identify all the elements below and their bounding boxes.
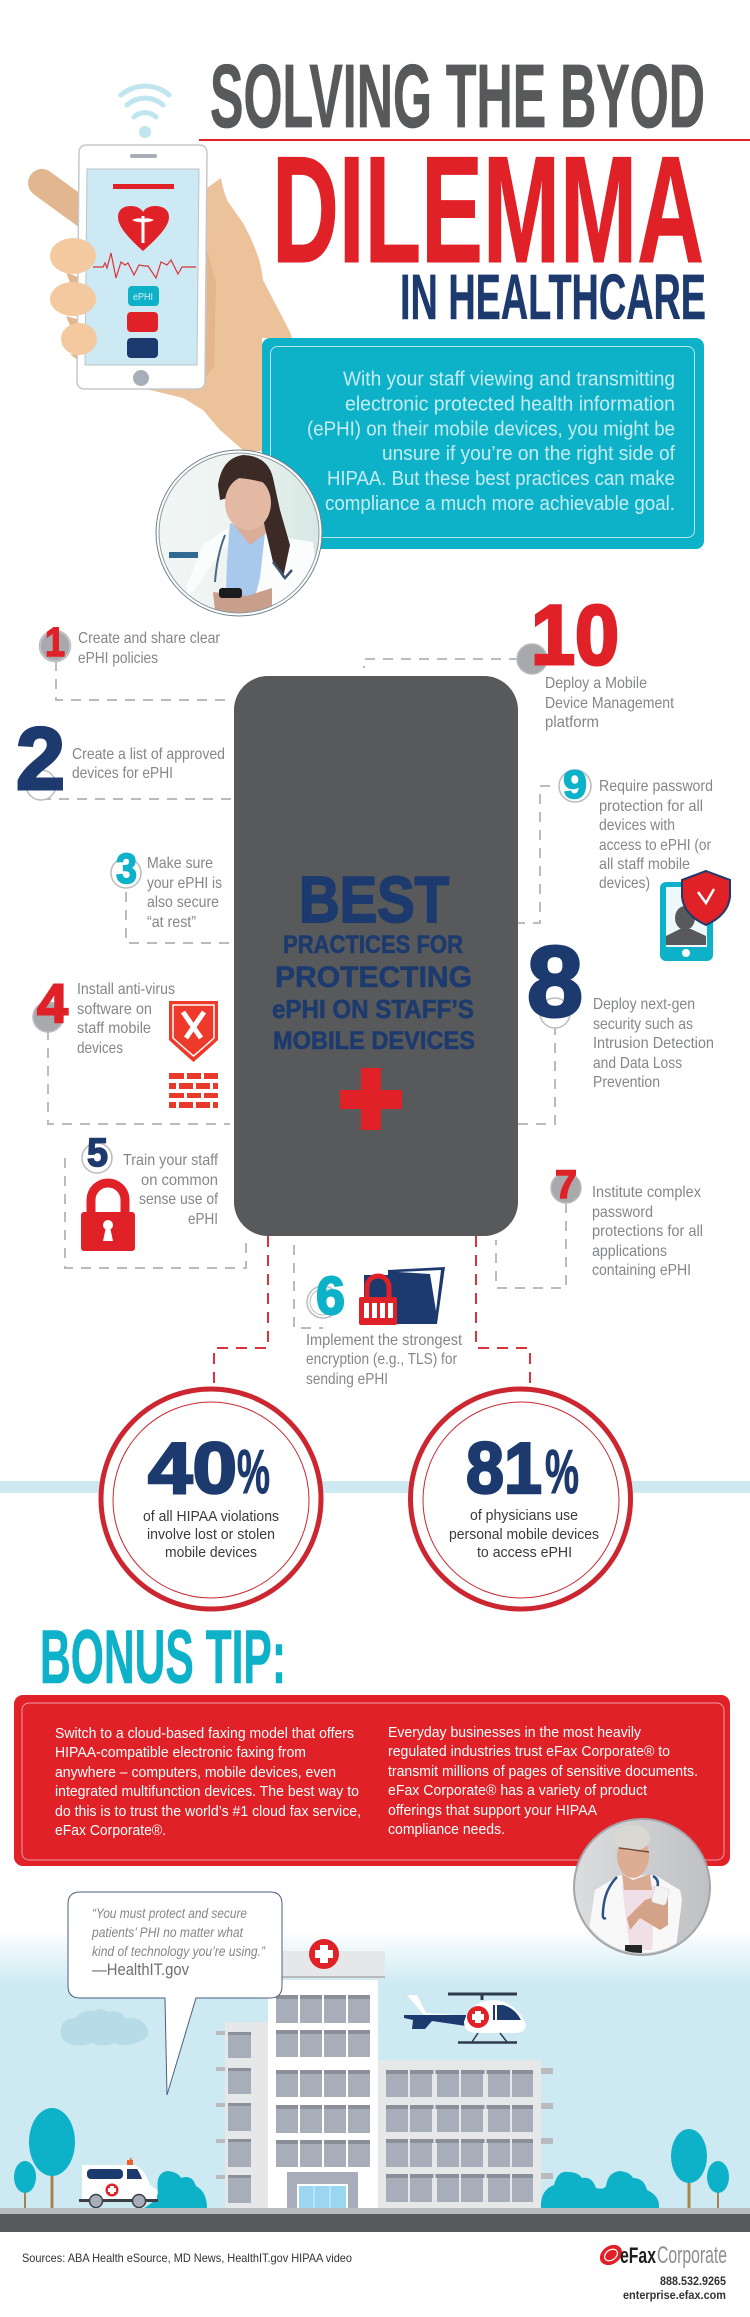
step 5 [81,1131,218,1251]
icon: padlock [81,1183,135,1251]
statistic text [143,1508,279,1561]
hospital scene [0,1939,750,2232]
button: ePHI: ePHI [133,292,153,303]
step 3: 3 [116,845,137,893]
icon: eFax swirl [596,2241,626,2269]
connector lines: red dashes [214,1236,530,1392]
connector lines: grey dashes [41,659,566,1328]
step 10 text: Deploy a Mobile [545,675,647,692]
intro text: With your staff viewing and transmitting [343,368,675,390]
building: left wing [216,2022,268,2208]
fingers [50,238,97,355]
step 8 text: Prevention [593,1074,660,1091]
illustration: hand holding phone [42,86,292,451]
step 5 text: Train your staff [123,1152,218,1169]
hand [42,178,292,451]
bonus tip right column: compliance needs. [388,1821,505,1838]
bonus tip left column: Switch to a cloud-based faxing model that offers [55,1725,354,1742]
callout: HealthIT.gov quote [68,1892,282,2095]
heading: best practices: PRACTICES FOR [283,931,463,959]
statistic text: of all HIPAA violations [143,1508,279,1525]
statistic text: of physicians use [470,1507,578,1524]
statistic text: involve lost or stolen [147,1526,275,1543]
step 2 text: devices for ePHI [72,765,173,782]
statistic text [449,1507,599,1561]
heading: best practices: PROTECTING [275,961,472,994]
step 7 text: password [592,1204,653,1221]
icon: shield with swords [169,1001,218,1062]
quote text: patients’ PHI no matter what [91,1924,244,1940]
helicopter [404,1994,526,2042]
sky background [0,1930,750,2208]
panel: intro [262,338,704,549]
step 7: 7 [555,1163,577,1207]
step 6 text: Implement the strongest [306,1332,463,1349]
step 3 text: your ePHI is [147,875,222,892]
step 3 text: “at rest” [147,914,196,931]
step 8 text: Deploy next-gen [593,996,695,1013]
step 9 text: devices) [599,875,650,892]
logo: eFax Corporate [596,2241,727,2269]
step 7 text: applications [592,1243,667,1260]
step 2 [16,709,225,808]
bonus tip left column: HIPAA-compatible electronic faxing from [55,1744,306,1761]
step 8 text: security such as [593,1016,693,1033]
statistic: 40 percent: % [237,1438,270,1507]
statistic text: mobile devices [165,1544,257,1561]
intro text: electronic protected health information [345,392,675,416]
step 10 text [545,675,674,731]
step 2 text: Create a list of approved [72,746,225,763]
step 4 text [77,981,175,1057]
panel: central phone [234,676,518,1236]
step 8 text [593,996,714,1091]
statistic: 40 percent [101,1389,321,1609]
step 9 [559,763,730,961]
statistic: 81 percent: % [545,1438,579,1507]
step 7 text: containing ePHI [592,1262,691,1279]
photo: senior doctor using phone [574,1819,710,1958]
heading: bonus tip: BONUS TIP: [40,1615,286,1700]
step 8 text: Intrusion Detection [593,1035,714,1052]
step 10 [517,588,674,731]
bonus tip right column: Everyday businesses in the most heavily [388,1724,641,1741]
step 10 text: platform [545,714,599,731]
button: navy [127,338,158,358]
step 9: 9 [563,763,587,807]
step 4 text: Install anti-virus [77,981,175,998]
step 3 text [147,855,222,931]
icon: phone with shield [660,871,730,961]
light blue band behind statistics [0,1481,750,1493]
icon: folder and combination lock [359,1267,445,1325]
step 3 text: also secure [147,894,219,911]
ambulance [79,2157,158,2208]
heartbeat line [93,253,196,278]
title rule [199,139,750,141]
logo: eFax Corporate: eFax [620,2243,657,2268]
statistic text: personal mobile devices [449,1526,599,1543]
intro text: compliance a much more achievable goal. [325,492,675,515]
bonus tip right column: eFax Corporate® has a variety of product [388,1782,648,1799]
step 4 text: software on [77,1001,152,1018]
home button [133,370,149,386]
icon: hospital cross [309,1939,339,1969]
button: ePHI [128,286,159,306]
icon: red cross [340,1068,402,1130]
bonus tip left column [55,1725,361,1839]
building: right wing [378,2060,553,2208]
step 7 text [592,1184,703,1279]
step 9 text: all staff mobile [599,856,690,873]
bonus tip right column: regulated industries trust eFax Corporate® to [388,1743,670,1760]
step 9 text: access to ePHI (or [599,837,712,854]
intro text: unsure if you’re on the right side of [382,442,675,465]
cloud [60,2009,148,2046]
quote text: “You must protect and secure [92,1905,247,1921]
icon: brick wall [169,1073,218,1108]
statistic: 81 percent [410,1389,630,1609]
step 5 text: ePHI [188,1211,218,1228]
step 7 text: Institute complex [592,1184,701,1201]
step 5 text [123,1152,218,1228]
step 4 [33,972,218,1108]
bush: right [541,2171,659,2208]
bonus tip left column: anywhere – computers, mobile devices, even [55,1764,336,1781]
step 10: 10 [531,588,619,682]
step 8: 8 [527,926,583,1038]
bonus tip left column: integrated multifunction devices. The best way to [55,1783,359,1800]
statistic: 81 percent: 81 [466,1429,542,1509]
phone number: 888.532.9265 [660,2276,727,2288]
step 6 text: sending ePHI [306,1371,388,1388]
bonus tip left column: do this is to trust the world’s #1 cloud fax service, [55,1803,361,1820]
heading: best practices: BEST [299,863,449,936]
step 1: 1 [45,619,65,665]
sources: Sources: ABA Health eSource, MD News, HealthIT.gov HIPAA video [22,2251,352,2265]
step 8 text: and Data Loss [593,1055,682,1072]
step 9 text [599,778,713,892]
intro text: (ePHI) on their mobile devices, you might be [307,418,675,440]
door [287,2172,358,2208]
step 4: 4 [37,972,68,1034]
step 6: 6 [316,1266,345,1326]
quote text: kind of technology you’re using.” [92,1943,266,1959]
button: red [127,312,158,332]
step 3 [111,845,222,931]
step 6 text: encryption (e.g., TLS) for [306,1351,458,1368]
quote text [91,1905,266,1959]
heading: best practices: MOBILE DEVICES [273,1027,475,1055]
step 7 text: protections for all [592,1223,703,1240]
step 5 text: sense use of [139,1191,218,1208]
statistic: 40 percent: 40 [148,1429,237,1509]
bonus tip right column: offerings that support your HIPAA [388,1802,597,1819]
trees [14,2108,729,2208]
step 9 text: protection for all [599,798,703,815]
bonus tip right column: transmit millions of pages of sensitive documents. [388,1763,698,1780]
step 2 text [72,746,225,782]
step 1 text: ePHI policies [78,650,158,667]
website: enterprise.efax.com [623,2290,726,2302]
icon: heart with caduceus [118,206,169,251]
statistic text: to access ePHI [477,1544,572,1561]
step 3 text: Make sure [147,855,213,872]
bonus tip right column [388,1724,698,1838]
step 9 text: Require password [599,778,713,795]
intro text: HIPAA. But these best practices can make [327,467,675,490]
intro text [307,368,675,515]
step 6 text [306,1332,463,1388]
step 4 text: devices [77,1040,123,1057]
heading: best practices [272,863,475,1055]
step 1 [40,619,221,667]
photo: doctor looking at phone [155,450,325,620]
step 1 text: Create and share clear [78,630,221,647]
phone [77,145,207,389]
building: central tower [268,1939,385,2208]
step 5 text: on common [141,1172,218,1189]
step 7 [551,1163,703,1279]
step 1 text [78,630,221,667]
road [0,2208,750,2232]
step 10 text: Device Management [545,695,674,712]
panel: bonus tip [14,1695,730,1866]
step 4 text: staff mobile [77,1020,151,1037]
quote source: —HealthIT.gov [92,1960,189,1979]
step 9 text: devices with [599,817,675,834]
heading: best practices: ePHI ON STAFF’S [272,994,474,1024]
bonus tip left column: eFax Corporate®. [55,1822,166,1839]
icon: wifi signal [121,86,169,138]
step 8 [527,926,714,1091]
step 2: 2 [16,709,65,808]
bush: left [144,2171,207,2208]
step 5: 5 [87,1131,108,1175]
step 6 [306,1266,463,1388]
